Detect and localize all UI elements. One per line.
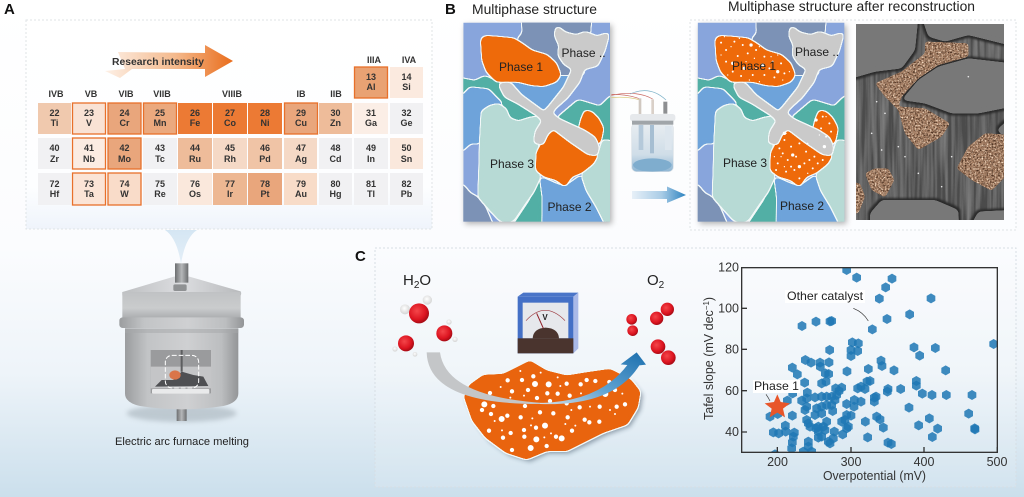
element labels: 27 — [225, 108, 235, 118]
star: Phase 1 — [765, 394, 790, 417]
element labels: Cr — [119, 118, 130, 128]
element labels: 49 — [366, 143, 376, 153]
phase labels: Phase 1 — [732, 59, 776, 73]
heading: multiphase structure: Multiphase structure — [472, 1, 597, 17]
element labels: 13 — [366, 72, 376, 82]
element labels: 47 — [296, 143, 306, 153]
phase labels — [490, 46, 606, 214]
phase labels: Phase .. — [795, 45, 839, 59]
y tick labels — [718, 260, 739, 439]
element cells — [38, 67, 423, 205]
element labels: W — [120, 189, 129, 199]
element labels: Ti — [51, 118, 58, 128]
phase labels: Phase 3 — [490, 157, 534, 171]
leader arrows — [766, 308, 868, 401]
element labels: Co — [224, 118, 236, 128]
panel: after reconstruction frame — [690, 20, 1016, 230]
group labels: VIIIB — [222, 89, 242, 99]
annotation: Other catalyst: Other catalyst — [787, 289, 864, 303]
ticks — [742, 308, 997, 452]
element labels: 77 — [225, 179, 235, 189]
group labels: VIIB — [153, 89, 171, 99]
element labels: 26 — [190, 108, 200, 118]
element labels: 81 — [366, 179, 376, 189]
element labels: Mn — [154, 118, 166, 128]
diagram: reconstructed multiphase structure — [688, 13, 854, 230]
element labels: 80 — [330, 179, 341, 189]
element labels: 75 — [155, 179, 165, 189]
element labels: Ta — [84, 189, 95, 199]
icon: electrochemical cell — [611, 91, 675, 172]
element labels: Ga — [365, 118, 378, 128]
group labels — [48, 55, 417, 99]
label: H2O: O — [419, 272, 431, 289]
element labels: 78 — [260, 179, 270, 189]
label: O2: 2 — [659, 280, 665, 291]
furnace window — [151, 350, 211, 394]
label: O2: O — [647, 272, 659, 289]
x axis title: Overpotential (mV) — [823, 469, 926, 483]
element labels: 41 — [84, 143, 94, 153]
element labels: 32 — [401, 108, 412, 118]
y tick labels: 80 — [725, 342, 739, 356]
icon: oxygen molecules — [626, 303, 676, 365]
funnel pointer from table to furnace — [165, 230, 197, 264]
arrow: reaction path — [427, 352, 646, 404]
element labels: 82 — [401, 179, 412, 189]
y axis title: ) — [702, 297, 716, 301]
catalyst particle — [464, 361, 643, 462]
x tick labels: 200 — [767, 455, 788, 469]
element labels: 22 — [49, 108, 60, 118]
element labels: 74 — [119, 179, 130, 189]
phase labels: Phase 2 — [780, 199, 824, 213]
element labels: 14 — [401, 72, 412, 82]
element labels: Cd — [330, 154, 342, 164]
y tick labels: 60 — [725, 384, 739, 398]
element labels: 43 — [155, 143, 165, 153]
icon: voltmeter — [518, 293, 578, 353]
panel label B: B — [445, 1, 456, 18]
panel: oxygen evolution — [375, 248, 1016, 487]
x tick labels: 500 — [987, 455, 1007, 469]
element labels: Zn — [330, 118, 341, 128]
element labels: Tc — [155, 154, 165, 164]
element labels: Re — [154, 189, 166, 199]
group labels: IB — [296, 89, 306, 99]
element labels: Hg — [330, 189, 342, 199]
research intensity arrow — [105, 45, 233, 78]
phase labels: Phase 2 — [548, 200, 592, 214]
x tick labels: 400 — [914, 455, 934, 469]
group labels: IIIA — [367, 55, 381, 65]
element labels: Ge — [400, 118, 413, 128]
element labels: Pt — [260, 189, 270, 199]
element labels: 48 — [330, 143, 341, 153]
diagram: multiphase structure — [453, 13, 620, 230]
icon: voltmeter: V — [542, 313, 548, 322]
element labels: Si — [402, 82, 411, 92]
element labels: Os — [189, 189, 201, 199]
element labels: Ag — [295, 154, 307, 164]
element labels: Ni — [260, 118, 270, 128]
data points — [766, 265, 998, 459]
arrow: to reconstruction — [632, 186, 686, 203]
element labels: Cu — [295, 118, 307, 128]
element labels: 79 — [296, 179, 306, 189]
label: H2O: H — [403, 272, 414, 289]
element labels: 40 — [49, 143, 60, 153]
x tick labels: 300 — [841, 455, 861, 469]
element labels: 45 — [225, 143, 235, 153]
element labels: 30 — [330, 108, 341, 118]
icon: electric arc furnace — [119, 263, 244, 422]
panel label A: A — [4, 1, 15, 18]
element labels: Ir — [227, 189, 233, 199]
phase labels — [723, 45, 839, 213]
element labels: Au — [295, 189, 307, 199]
annotation: Phase 1: Phase 1 — [754, 379, 799, 393]
icon: water molecules — [392, 295, 458, 357]
label: H2O: 2 — [414, 280, 420, 291]
element labels: 23 — [84, 108, 94, 118]
element labels: Pb — [401, 189, 413, 199]
group labels: VB — [85, 89, 98, 99]
element labels: V — [86, 118, 92, 128]
element labels: 31 — [366, 108, 376, 118]
nanoparticle dots — [721, 37, 831, 178]
group labels: IVB — [48, 89, 64, 99]
x tick labels — [767, 455, 1007, 469]
micrograph: SEM image — [856, 24, 1004, 220]
element labels: Ru — [189, 154, 201, 164]
y axis title: −1 — [702, 301, 711, 310]
group labels: IIB — [330, 89, 342, 99]
element labels: 44 — [190, 143, 200, 153]
research intensity arrow: Research intensity — [112, 57, 204, 68]
phase labels: Phase 1 — [499, 60, 543, 74]
element labels: 29 — [296, 108, 306, 118]
phase labels: Phase 3 — [723, 156, 767, 170]
phase labels: Phase .. — [562, 46, 606, 60]
group labels: VIB — [118, 89, 134, 99]
element labels: 73 — [84, 179, 94, 189]
plot frame — [742, 268, 997, 452]
element labels: Mo — [118, 154, 131, 164]
group labels: IVA — [402, 55, 417, 65]
element labels: 25 — [155, 108, 165, 118]
element labels: 28 — [260, 108, 270, 118]
element labels: Zr — [50, 154, 59, 164]
y tick labels: 120 — [718, 260, 739, 274]
panel label C: C — [355, 248, 366, 265]
element labels: Al — [366, 82, 376, 92]
element labels: 42 — [119, 143, 130, 153]
caption: furnace: Electric arc furnace melting — [115, 436, 249, 448]
element labels: Pd — [259, 154, 271, 164]
chart: Tafel slope vs overpotential — [702, 260, 1007, 483]
element labels: In — [367, 154, 375, 164]
element labels: Fe — [190, 118, 200, 128]
element labels: Nb — [83, 154, 95, 164]
element labels: 72 — [49, 179, 60, 189]
panel: periodic table — [26, 20, 432, 229]
element labels: 24 — [119, 108, 130, 118]
element labels: 46 — [260, 143, 270, 153]
y tick labels: 40 — [725, 425, 739, 439]
element labels: Sn — [401, 154, 412, 164]
element labels: 50 — [401, 143, 412, 153]
element labels: 76 — [190, 179, 200, 189]
element labels: Tl — [367, 189, 375, 199]
y axis title: Tafel slope (mV dec — [702, 310, 716, 420]
y tick labels: 100 — [718, 302, 739, 316]
element labels: Rh — [224, 154, 236, 164]
element labels: Hf — [50, 189, 60, 199]
element labels — [49, 72, 413, 199]
